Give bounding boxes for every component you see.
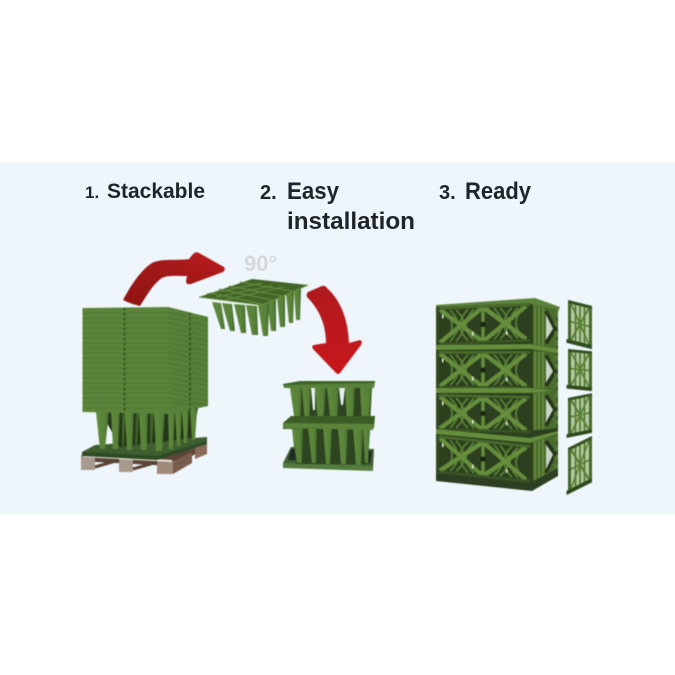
top slab [436,298,560,312]
stage 3: assembled crates [436,298,560,491]
upper cones [290,388,372,425]
crate row 1 [436,303,558,350]
pallet [81,442,207,474]
panel 3 [566,393,592,438]
stage 1: stack on pallet [81,307,208,474]
top tray [283,382,375,388]
panel 4 [566,436,592,495]
crate row 3 [436,390,558,433]
cones [212,288,301,336]
background panel [0,162,675,514]
stage 2: rotated tray [199,279,308,336]
heading: 3. Ready: Ready [465,178,532,205]
dark interior [292,388,372,424]
crate row 4 [436,433,558,483]
arrow: red curved downward [307,286,362,374]
crate row 2 [436,350,558,391]
heading: 2. Easy installation [260,178,415,235]
cones under stack [96,408,198,451]
heading: 1. Stackable: Stackable [107,180,205,203]
crate backing [436,300,558,488]
base slab [436,468,558,491]
heading: 2. Easy installation: installation [287,208,415,235]
middle tray [283,416,375,429]
heading: 2. Easy installation: 2. [260,182,277,204]
lower cones [292,428,370,465]
stage 2: stacked trays [283,381,375,471]
stacked trays [82,307,208,414]
heading: 2. Easy installation: Easy [287,178,340,205]
heading: 3. Ready: 3. [439,182,456,204]
base tray [283,447,374,470]
heading: 1. Stackable: 1. [85,183,99,202]
tray top [199,279,308,305]
heading: 3. Ready [439,178,532,205]
base plate [82,437,207,458]
panel 1 [566,300,592,349]
stage 3: side panels [566,300,592,495]
panel 2 [566,349,592,391]
label: 90 degrees: 90° [244,251,277,276]
arrow: red curved to the right [123,252,225,306]
